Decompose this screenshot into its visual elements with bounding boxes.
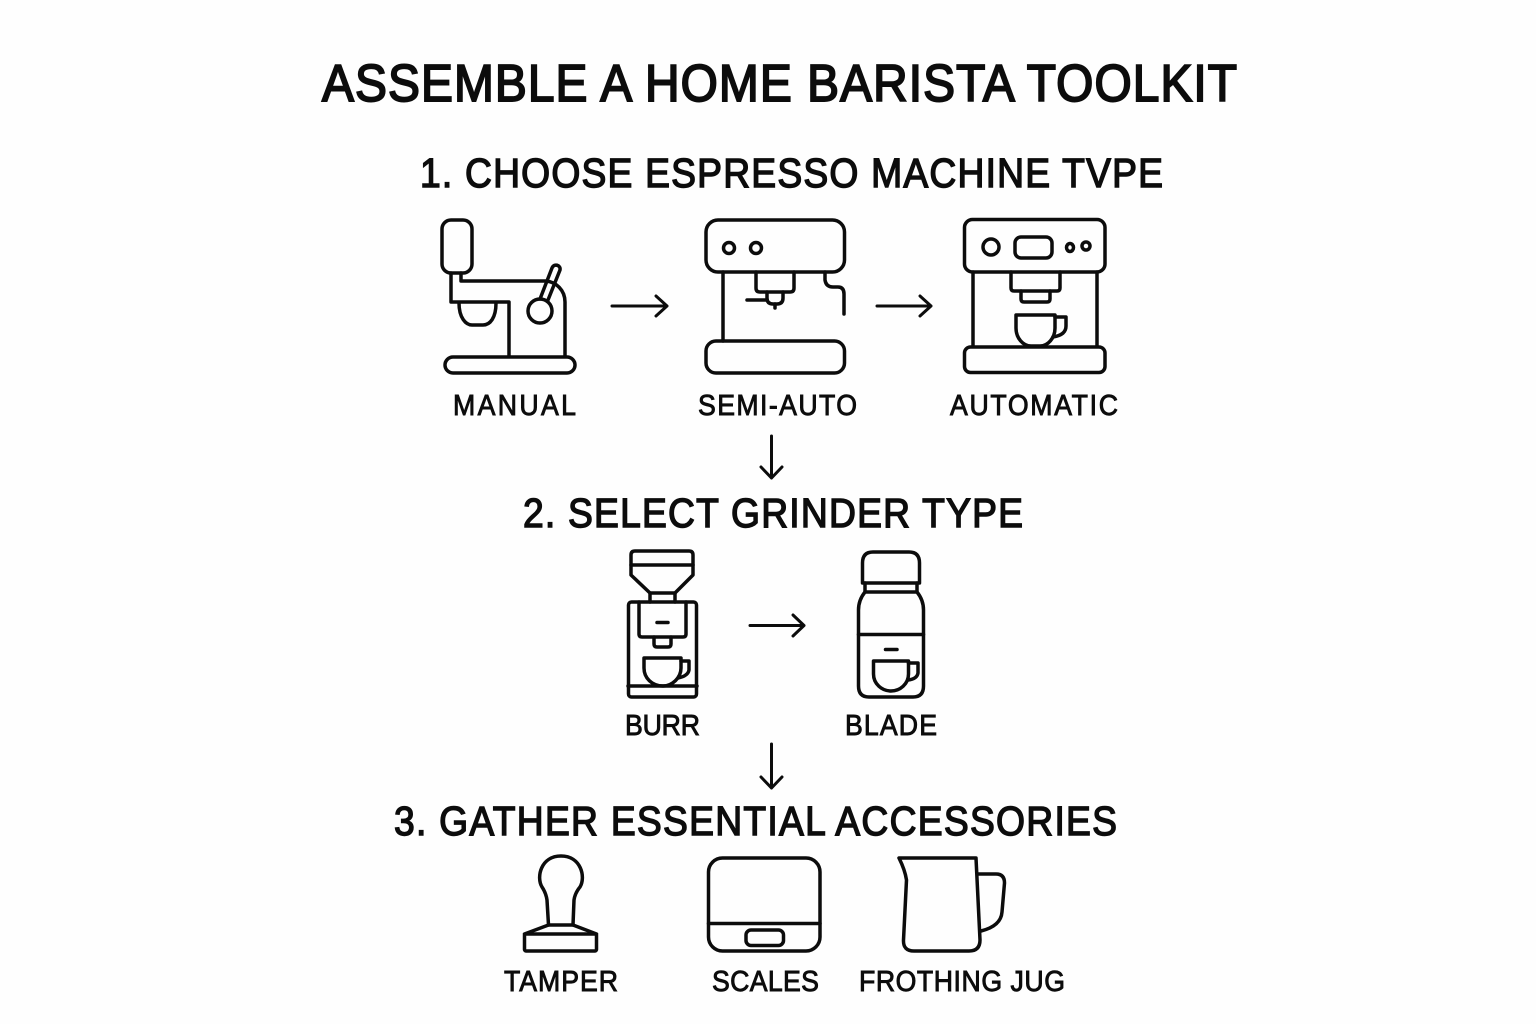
- arrow: manual to semi-auto: [612, 296, 667, 316]
- label: tamper: TAMPER: [504, 965, 618, 997]
- arrow: step 1 to step 2: [761, 436, 782, 478]
- label: burr: BURR: [625, 709, 700, 741]
- arrow: burr to blade: [750, 615, 804, 636]
- heading: step 2: 2. SELECT GRINDER TYPE: [523, 492, 1023, 536]
- title: ASSEMBLE A HOME BARISTA TOOLKIT: [322, 54, 1237, 112]
- heading: step 3: 3. GATHER ESSENTIAL ACCESSORIES: [394, 800, 1117, 844]
- icon: scales: [708, 858, 820, 951]
- icon: semi-auto machine: [706, 220, 844, 373]
- icon: blade grinder: [858, 552, 924, 697]
- label: blade: BLADE: [845, 709, 937, 741]
- label: frothing jug: FROTHING JUG: [859, 965, 1065, 997]
- icon: tamper: [524, 856, 596, 951]
- icon: frothing jug: [899, 858, 1004, 951]
- icon: manual machine: [442, 220, 575, 373]
- arrow: semi-auto to automatic: [877, 296, 931, 316]
- arrow: step 2 to step 3: [761, 744, 782, 788]
- label: semi-auto: SEMI-AUTO: [698, 389, 857, 421]
- heading: step 1: 1. CHOOSE ESPRESSO MACHINE TVPE: [420, 152, 1163, 196]
- icon: burr grinder: [628, 551, 697, 697]
- label: scales: SCALES: [712, 965, 819, 997]
- label: manual: MANUAL: [453, 389, 576, 421]
- icon: automatic machine: [964, 220, 1105, 372]
- label: automatic: AUTOMATIC: [950, 389, 1118, 421]
